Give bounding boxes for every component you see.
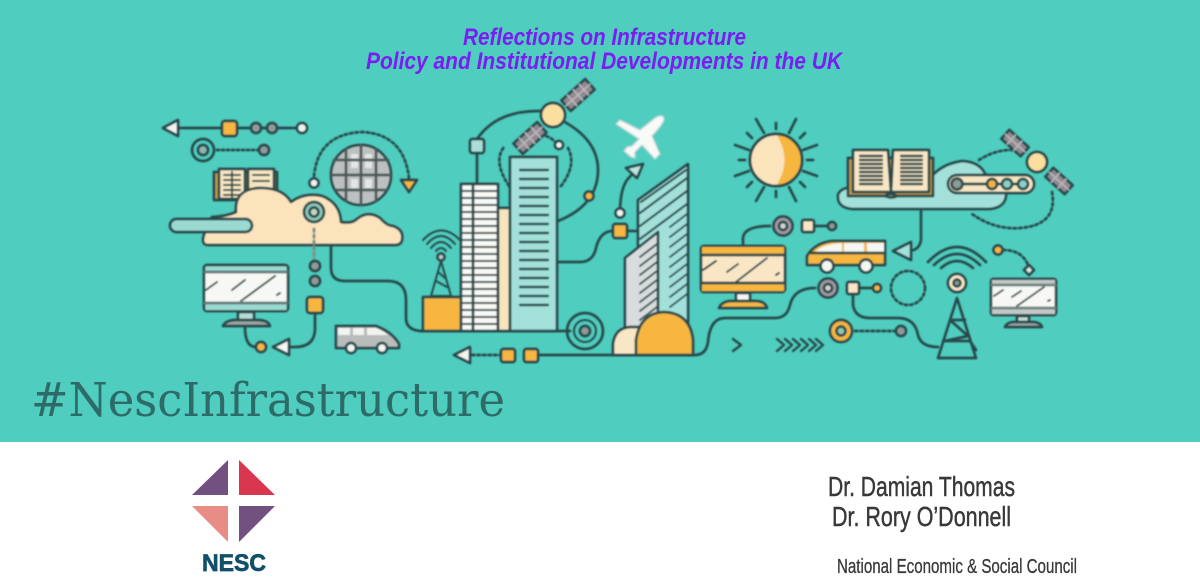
icon: left van xyxy=(336,326,399,353)
building: teal tower xyxy=(510,157,557,331)
icon: central satellite with orbit xyxy=(470,79,598,221)
upper node row xyxy=(774,216,836,236)
icon: right satellite with orbit xyxy=(948,130,1073,228)
icon: cloud pill bar xyxy=(170,219,252,232)
connector nodes below cloud xyxy=(256,261,323,355)
authors: Dr. Rory O’Donnell xyxy=(832,501,1011,532)
icon: orange monitor xyxy=(701,246,785,308)
connector lines xyxy=(245,173,938,355)
title: Reflections on Infrastructure xyxy=(463,24,746,51)
icon: cloud xyxy=(203,188,402,262)
building: beige block xyxy=(498,208,510,331)
icon: right cloud xyxy=(838,161,1006,209)
icon: plane xyxy=(616,116,664,159)
lower node row xyxy=(818,271,925,305)
title: Policy and Institutional Developments in the UK xyxy=(366,48,843,75)
authors xyxy=(828,471,1015,532)
NESC logo: NESC xyxy=(202,550,266,577)
icon: left monitor xyxy=(204,265,288,326)
city infrastructure illustration xyxy=(163,79,1073,363)
icon: orange bus xyxy=(807,241,885,272)
icon: sun xyxy=(735,119,817,201)
arrow into bus xyxy=(893,242,911,260)
teal banner background xyxy=(0,0,1200,442)
organisation: National Economic & Social Council xyxy=(837,556,1077,578)
node with arrow to plane xyxy=(613,164,643,238)
building: striped tower xyxy=(461,184,498,331)
building: beige dome xyxy=(613,327,640,355)
dotted arc with arrow xyxy=(310,132,417,192)
icon: radio tower on box xyxy=(423,230,461,331)
icon: right monitor xyxy=(991,279,1056,327)
title xyxy=(366,24,843,75)
icon: globe xyxy=(331,145,391,205)
building: grey tower xyxy=(625,232,658,331)
orange target with dotted link xyxy=(830,320,906,342)
authors: Dr. Damian Thomas xyxy=(828,471,1015,502)
icon: right wifi tower xyxy=(928,247,986,358)
hashtag: #NescInfrastructure xyxy=(31,373,505,428)
icon: left open book xyxy=(214,169,277,200)
top left node row xyxy=(163,120,307,161)
icon: right open book xyxy=(848,150,933,198)
chevrons xyxy=(733,339,823,351)
icon: target on base line xyxy=(567,313,603,349)
building: glass skyscraper xyxy=(638,164,688,331)
bottom left arrow with nodes xyxy=(454,347,538,363)
building: orange dome xyxy=(636,312,693,355)
NESC logo xyxy=(192,460,275,577)
icon: dotted link to right monitor xyxy=(994,246,1034,275)
white footer panel xyxy=(0,442,1200,586)
